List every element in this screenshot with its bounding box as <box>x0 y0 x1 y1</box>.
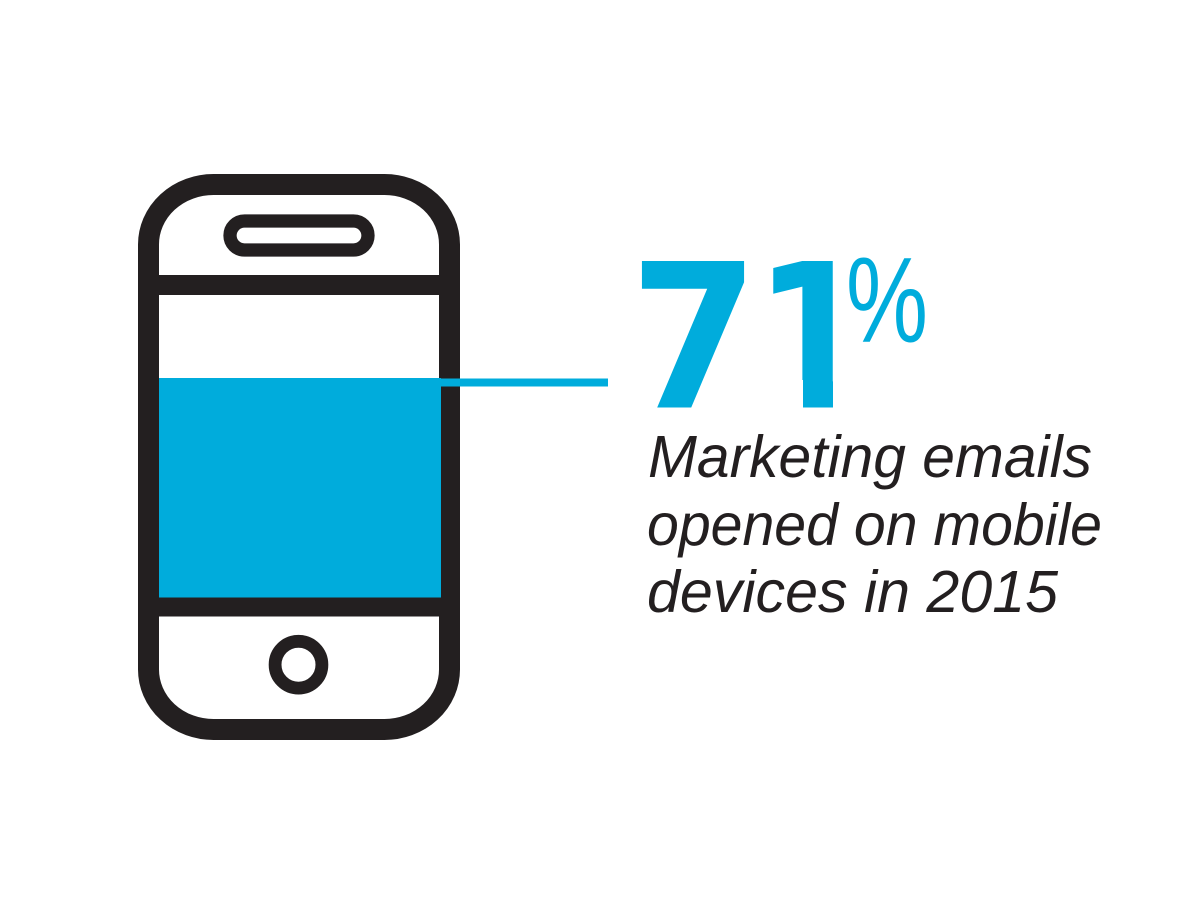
phone body outline <box>148 184 450 730</box>
home button <box>275 641 322 688</box>
connector line <box>441 378 608 386</box>
caption line 1: Marketing emails <box>648 424 1092 490</box>
percent sign: % <box>846 232 928 368</box>
top divider <box>150 275 450 295</box>
caption text <box>647 424 1102 625</box>
digit 7: 7 <box>630 221 759 455</box>
statistic: 71 percent <box>642 258 925 408</box>
digit 1: 1 <box>754 221 873 455</box>
caption line 3: devices in 2015 <box>647 559 1058 625</box>
infographic canvas <box>138 174 1100 740</box>
speaker <box>230 221 368 250</box>
icon: smartphone with 71% fill <box>148 184 450 730</box>
caption line 2: opened on mobile <box>647 492 1102 558</box>
phone fill level <box>159 378 441 598</box>
bottom divider <box>150 597 450 616</box>
